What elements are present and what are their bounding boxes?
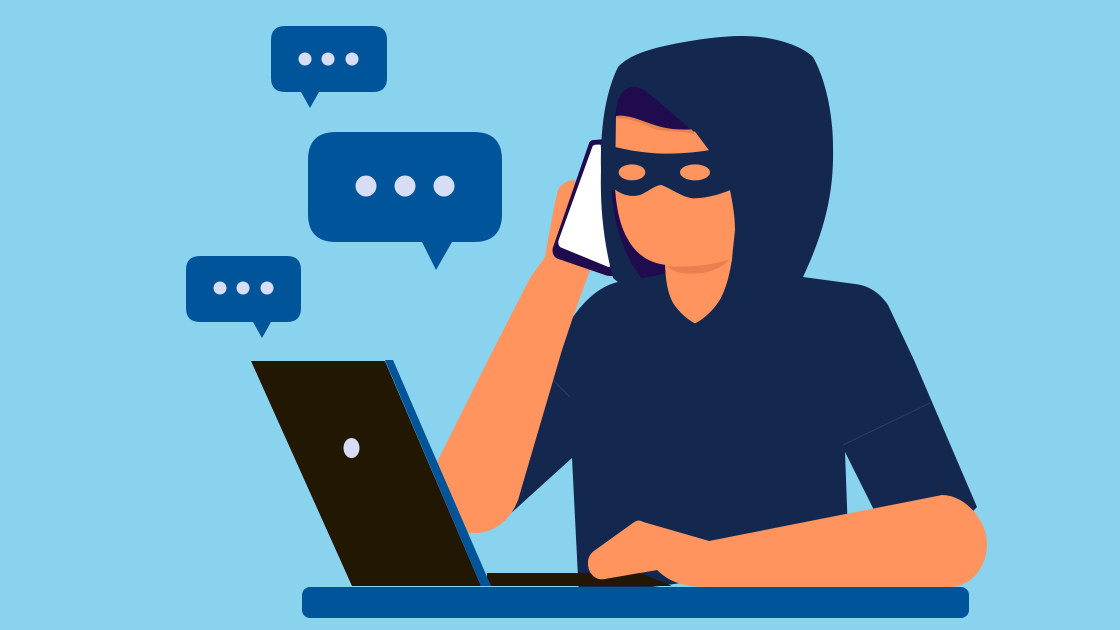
chat bubble: middle large <box>308 132 502 270</box>
laptop screen back <box>251 361 481 586</box>
raised arm holding phone <box>430 180 590 533</box>
chat bubble: lower small <box>186 256 301 338</box>
table <box>302 587 969 618</box>
laptop base <box>487 573 672 586</box>
torso and sleeves <box>509 277 977 597</box>
face with mask <box>612 87 743 323</box>
chin shadow <box>667 259 729 274</box>
hair <box>615 87 695 134</box>
hood <box>601 36 833 330</box>
mask <box>613 147 743 198</box>
hand overlapping base <box>588 521 709 579</box>
laptop <box>251 360 672 586</box>
inner hood shadow <box>612 190 667 278</box>
face <box>615 116 735 266</box>
forehead shadow <box>616 116 695 135</box>
neck <box>665 257 732 323</box>
lower arm and hand on keyboard <box>588 495 987 587</box>
phone <box>552 139 616 276</box>
laptop screen edge <box>385 360 491 586</box>
chat bubble: top small <box>271 26 387 108</box>
laptop camera dot <box>344 438 360 458</box>
